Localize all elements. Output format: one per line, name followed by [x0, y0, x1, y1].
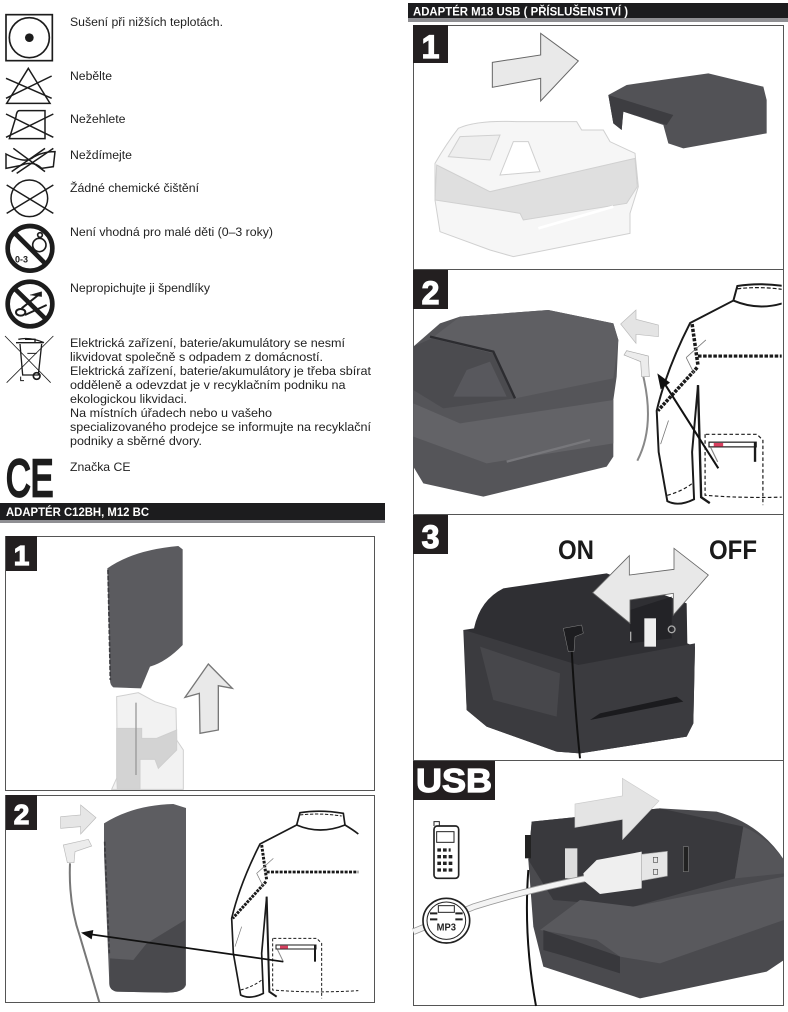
text block: symbol descriptions: podniky a sběrné dvory.	[70, 434, 202, 448]
black cable	[527, 870, 536, 1006]
number badge 2	[413, 270, 448, 311]
icon: CE mark: CE	[6, 449, 53, 507]
arrow right	[61, 805, 96, 834]
icon: not for small children: 0-3	[15, 255, 28, 265]
label OFF: OFF	[709, 535, 757, 565]
number badge 1: 1	[14, 540, 29, 571]
heading: adapter M18 USB: ADAPTÉR M18 USB ( PŘÍSLUŠENSTVÍ )	[413, 4, 628, 18]
number badge 1	[6, 536, 37, 571]
text block: symbol descriptions: Elektrická zařízení, baterie/akumulátory je třeba sbírat	[70, 364, 372, 378]
switch	[644, 618, 656, 647]
text block: symbol descriptions: Nežehlete	[70, 112, 126, 126]
panel: right step 2	[413, 270, 788, 514]
text block: symbol descriptions: Není vhodná pro malé děti (0–3 roky)	[70, 225, 273, 239]
number badge 1: 1	[422, 29, 439, 65]
light battery	[435, 121, 638, 257]
dark adapter	[608, 73, 767, 148]
plug and cable	[624, 351, 649, 461]
panel: right step 1	[413, 25, 784, 270]
icon: do not pin	[8, 282, 52, 326]
label ON: ON	[558, 535, 594, 565]
text block: symbol descriptions: Značka CE	[70, 460, 130, 474]
double arrow	[593, 548, 708, 623]
number badge 3	[413, 515, 448, 555]
panel: left step 2	[6, 795, 374, 1002]
jacket	[232, 811, 358, 998]
white USB cable	[413, 878, 587, 932]
number badge 2: 2	[422, 275, 439, 311]
dark battery	[413, 310, 618, 497]
icon: phone	[434, 822, 459, 878]
icon: not for small children	[8, 226, 52, 271]
cable	[563, 625, 583, 758]
dark battery	[528, 808, 784, 998]
heading: adapter C12BH, M12 BC: ADAPTÉR C12BH, M12 BC	[6, 504, 149, 519]
illustration: cable into adapter, jacket	[61, 804, 358, 1002]
icon: MP3 player: MP3	[437, 923, 456, 934]
text block: symbol descriptions: specializovaného prodejce se informujte na recyklační	[70, 420, 372, 434]
icon: do not wring	[6, 148, 55, 173]
illustration: USB charging	[413, 778, 784, 1006]
text block: symbol descriptions: odděleně a odevzdat je v recyklačním podniku na	[70, 378, 346, 392]
number badge 1	[413, 25, 448, 65]
text block: symbol descriptions: Sušení při nižších teplotách.	[70, 15, 223, 29]
number badge 3: 3	[422, 519, 439, 555]
heading: adapter M18 USB	[408, 3, 788, 22]
washing and safety symbols	[5, 15, 55, 507]
text block: symbol descriptions: ekologickou likvidaci.	[70, 392, 187, 406]
number badge 2: 2	[14, 799, 29, 830]
black arrow	[81, 930, 283, 962]
heading: adapter C12BH, M12 BC	[0, 503, 385, 523]
dark adapter	[107, 546, 183, 688]
arrow left	[621, 310, 658, 343]
illustration: adapter lifted off battery	[107, 546, 232, 789]
icon: MP3 player	[423, 898, 470, 943]
dark battery	[463, 573, 695, 753]
jacket	[657, 284, 788, 505]
arrow right	[575, 778, 659, 839]
illustration: adapter on battery with cable and jacket	[413, 284, 788, 505]
arrow right	[492, 33, 578, 101]
text block: symbol descriptions: likvidovat společně s odpadem z domácností.	[70, 350, 323, 364]
black arrow	[657, 373, 718, 468]
dark adapter	[104, 804, 186, 993]
number badge 2	[6, 795, 37, 830]
plug and cable	[63, 839, 99, 1002]
text block: symbol descriptions: Nepropichujte ji špendlíky	[70, 281, 211, 295]
panel: left step 1	[6, 536, 374, 790]
icon: do not bleach	[6, 68, 52, 103]
arrow up	[185, 664, 232, 733]
illustration: battery with switch	[463, 548, 708, 758]
text block: symbol descriptions	[70, 15, 372, 474]
illustration: battery and adapter	[435, 33, 767, 257]
text block: symbol descriptions: Elektrická zařízení, baterie/akumulátory se nesmí	[70, 336, 346, 350]
USB plug	[583, 851, 667, 894]
text block: symbol descriptions: Nebělte	[70, 69, 112, 83]
USB badge: USB	[416, 762, 492, 799]
icon: no dry cleaning	[7, 180, 53, 217]
icon: do not iron	[6, 111, 53, 139]
panel: right step 3	[413, 514, 784, 760]
text block: symbol descriptions: Žádné chemické čištění	[70, 180, 200, 195]
icon: tumble dry low	[6, 15, 52, 61]
panel: USB	[413, 760, 784, 1006]
text block: symbol descriptions: Neždímejte	[70, 148, 132, 162]
icon: crossed-out waste bin	[5, 336, 53, 383]
light battery	[112, 693, 183, 789]
text block: symbol descriptions: Na místních úřadech nebo u vašeho	[70, 406, 272, 420]
